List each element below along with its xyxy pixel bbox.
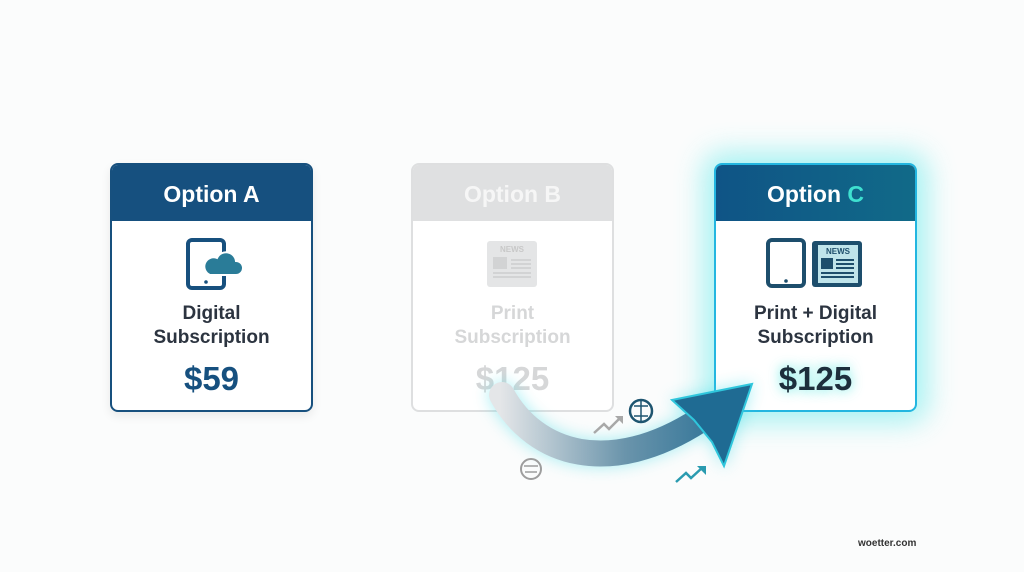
- text C: [754, 303, 877, 348]
- header B: Option B: [464, 181, 561, 207]
- icon: trend up (grey): [594, 416, 623, 433]
- text B: [454, 303, 571, 348]
- header A: Option A: [163, 181, 260, 207]
- text A: [153, 303, 270, 348]
- icon: newspaper: [487, 241, 537, 287]
- text B: Print: [491, 303, 534, 324]
- text A: Subscription: [153, 327, 270, 348]
- text C: Print + Digital: [754, 303, 877, 324]
- header C: Option C: [767, 181, 864, 207]
- card: option A: [110, 163, 313, 412]
- icon: brain (teal): [630, 400, 652, 422]
- card: option B (faded): [411, 163, 614, 412]
- icon: newspaper: NEWS: [500, 245, 525, 254]
- price A: $59: [184, 360, 239, 397]
- header C: [716, 165, 915, 221]
- icon: tablet with cloud: [186, 238, 242, 290]
- watermark: woetter.com: [858, 538, 916, 549]
- icon: trend up (teal): [676, 466, 706, 482]
- header A: [112, 165, 311, 221]
- text A: Digital: [182, 303, 241, 324]
- text C: Subscription: [757, 327, 874, 348]
- icon: brain (grey): [521, 459, 541, 479]
- price C: $125: [779, 360, 852, 397]
- icon: tablet and newspaper: [766, 238, 862, 288]
- price B: $125: [476, 360, 549, 397]
- icon: tablet and newspaper: NEWS: [826, 247, 851, 256]
- header B: [413, 165, 612, 221]
- text B: Subscription: [454, 327, 571, 348]
- card: option C (highlighted): [714, 163, 917, 412]
